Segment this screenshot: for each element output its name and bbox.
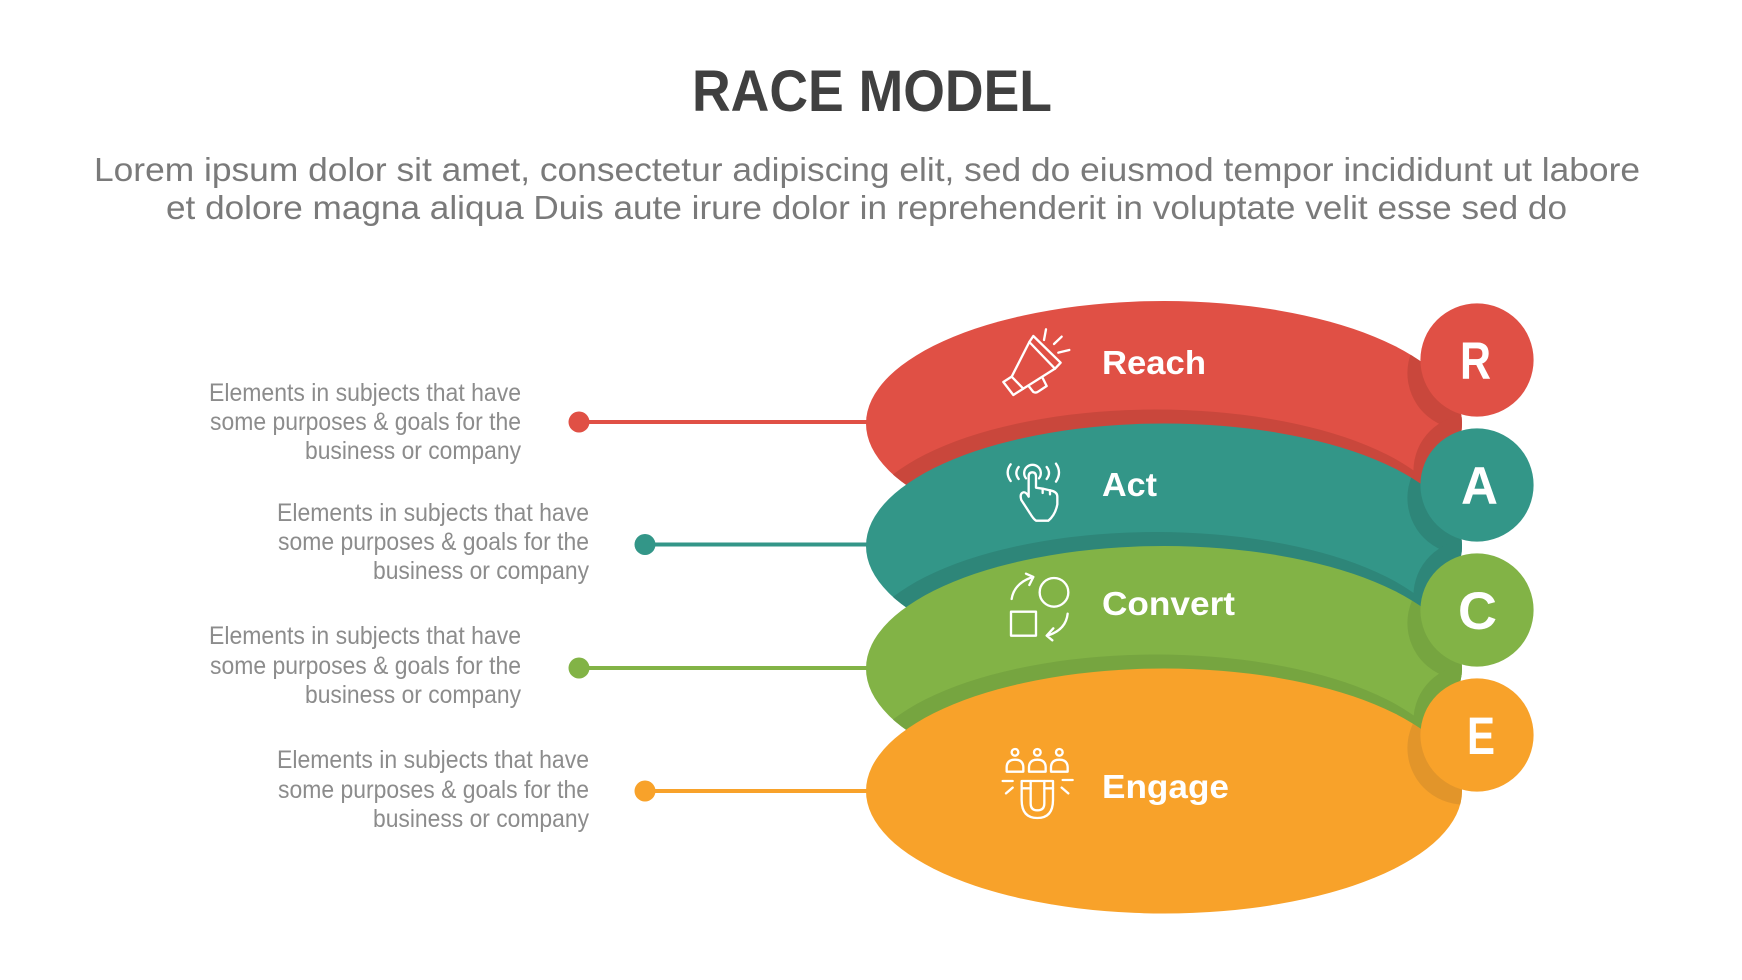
reach ellipse (866, 301, 1462, 546)
connector: engage (634, 780, 870, 802)
text block: act description (277, 499, 589, 585)
subtitle: et dolore magna aliqua Duis aute irure dolor in reprehenderit in voluptate velit esse sed do (166, 189, 1567, 226)
badge: C: C (1458, 582, 1497, 641)
badge: A (1420, 428, 1534, 542)
engage ellipse (866, 668, 1462, 914)
convert shading (893, 600, 1462, 730)
label: Engage: Engage (1102, 768, 1229, 805)
icon: shapes and arrows (1011, 574, 1068, 640)
badge: A: A (1461, 457, 1498, 516)
text block: engage description: some purposes & goals for the (278, 776, 589, 804)
text block: engage description (277, 746, 589, 833)
connector: act (634, 534, 870, 555)
panel: engage band (866, 668, 1534, 914)
convert ellipse (866, 546, 1462, 791)
text block: convert description: business or company (305, 681, 521, 709)
text block: convert description (209, 622, 521, 709)
panel: reach band (866, 301, 1534, 485)
text block: engage description: Elements in subjects that have (277, 746, 589, 774)
badge: C (1420, 553, 1534, 667)
badge: E (1420, 678, 1534, 792)
text block: act description: Elements in subjects that have (277, 499, 589, 527)
reach shading (893, 354, 1462, 485)
label: Convert: Convert (1102, 585, 1235, 622)
text block: act description: some purposes & goals for the (278, 528, 589, 556)
text block: reach description: business or company (305, 437, 521, 465)
act ellipse (866, 424, 1462, 668)
text block: reach description: Elements in subjects that have (209, 379, 521, 407)
subtitle: Lorem ipsum dolor sit amet, consectetur adipiscing elit, sed do eiusmod tempor incididunt ut labore (94, 151, 1640, 188)
icon: magnet and people (1003, 749, 1073, 818)
title: RACE MODEL (692, 59, 1052, 124)
panel: convert band (866, 546, 1534, 730)
label: Act: Act (1102, 466, 1157, 503)
text block: reach description (209, 379, 521, 465)
badge: R (1420, 303, 1534, 417)
text block: convert description: some purposes & goals for the (210, 652, 521, 680)
text block: engage description: business or company (373, 805, 589, 833)
connector: convert (568, 658, 870, 678)
label: Reach: Reach (1102, 344, 1206, 381)
icon: pointing hand (1008, 464, 1059, 521)
connector: reach (568, 412, 870, 432)
text block: act description: business or company (373, 557, 589, 585)
text block: reach description: some purposes & goals for the (210, 408, 521, 436)
subtitle (94, 151, 1640, 226)
badge: E: E (1467, 707, 1495, 766)
badge: R: R (1460, 332, 1491, 391)
panel: act band (866, 424, 1534, 608)
text block: convert description: Elements in subjects that have (209, 622, 521, 650)
icon: megaphone (1003, 329, 1069, 395)
engage shading (1408, 724, 1462, 804)
act shading (893, 478, 1462, 608)
